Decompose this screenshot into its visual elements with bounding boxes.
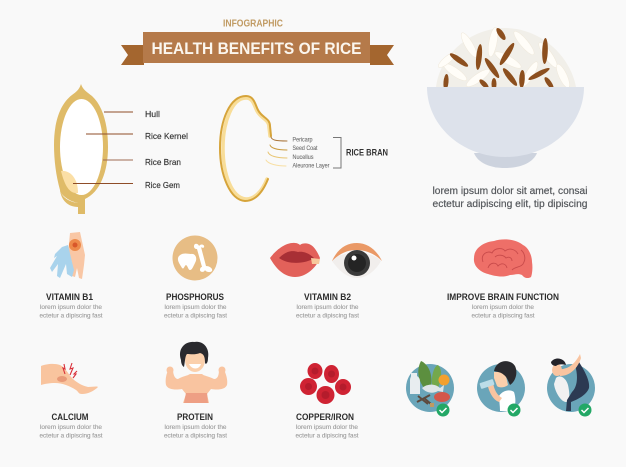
phosphorus caption [164,292,227,320]
icon: drinking water [477,361,525,416]
title banner: HEALTH BENEFITS OF RICE [152,39,362,58]
icon: yoga pose [547,354,595,416]
icon: tooth and bone [172,236,218,280]
vitamin b1 caption: VITAMIN B1 [46,292,93,302]
copper/iron caption: ectetur a dipiscing fast [296,432,359,440]
icon: eye [332,243,382,278]
improve brain function caption: lorem ipsum dolor the [472,304,534,311]
improve brain function caption: IMPROVE BRAIN FUNCTION [447,292,559,302]
icon: hand and wrist [50,232,85,279]
grain labels: Rice Kernel [145,131,188,141]
grain labels: Rice Bran [145,157,181,167]
rice bran labels [292,136,388,170]
grain labels: Hull [145,109,160,119]
protein caption: ectetur a dipiscing fast [164,432,227,440]
calcium caption: lorem ipsum dolor the [40,424,102,431]
improve brain function caption [447,292,559,320]
copper/iron caption [296,412,359,440]
vitamin b1 caption: lorem ipsum dolor the [40,304,102,311]
icon: red blood cells [300,363,351,404]
rice grain diagram [54,84,133,214]
vitamin b2 caption: VITAMIN B2 [304,292,351,302]
vitamin b2 caption: ectetur a dipiscing fast [296,312,359,320]
bowl description text [432,186,588,210]
phosphorus caption: lorem ipsum dolor the [164,304,227,311]
rice bran cross-section [220,96,287,201]
rice bran labels: RICE BRAN [346,148,388,158]
vitamin b2 caption [296,292,359,320]
title banner [121,32,394,65]
calcium caption [40,412,103,440]
bowl description text: lorem ipsum dolor sit amet, consai [432,186,588,197]
protein caption: PROTEIN [177,412,213,422]
icon: leg with cramp [41,363,98,394]
rice bowl [427,27,584,168]
grain labels: Rice Gem [145,180,180,190]
rice bran labels: Aleurone Layer [292,162,330,170]
vitamin b1 caption: ectetur a dipiscing fast [40,312,103,320]
calcium caption: ectetur a dipiscing fast [40,432,103,440]
icon: healthy food [406,361,454,416]
white rice grains [436,27,572,89]
copper/iron caption: COPPER/IRON [296,412,354,422]
improve brain function caption: ectetur a dipiscing fast [472,312,535,320]
icon: lips [270,243,320,277]
subtitle: infographic: INFOGRAPHIC [223,18,283,30]
rice bran labels: Pericarp [292,136,313,144]
vitamin b2 caption: lorem ipsum dolor the [296,304,359,311]
protein caption: lorem ipsum dolor the [164,424,227,431]
rice bran labels: Seed Coat [292,145,318,152]
protein caption [164,412,227,440]
icon: brain [474,239,532,278]
phosphorus caption: PHOSPHORUS [166,292,224,302]
calcium caption: CALCIUM [52,412,88,422]
rice bran labels: Nucellus [292,154,314,161]
copper/iron caption: lorem ipsum dolor the [296,424,358,431]
phosphorus caption: ectetur a dipiscing fast [164,312,227,320]
icon: muscular man [166,342,227,403]
vitamin b1 caption [40,292,103,320]
bowl description text: ectetur adipiscing elit, tip dipiscing [432,199,588,210]
grain labels [145,109,188,190]
